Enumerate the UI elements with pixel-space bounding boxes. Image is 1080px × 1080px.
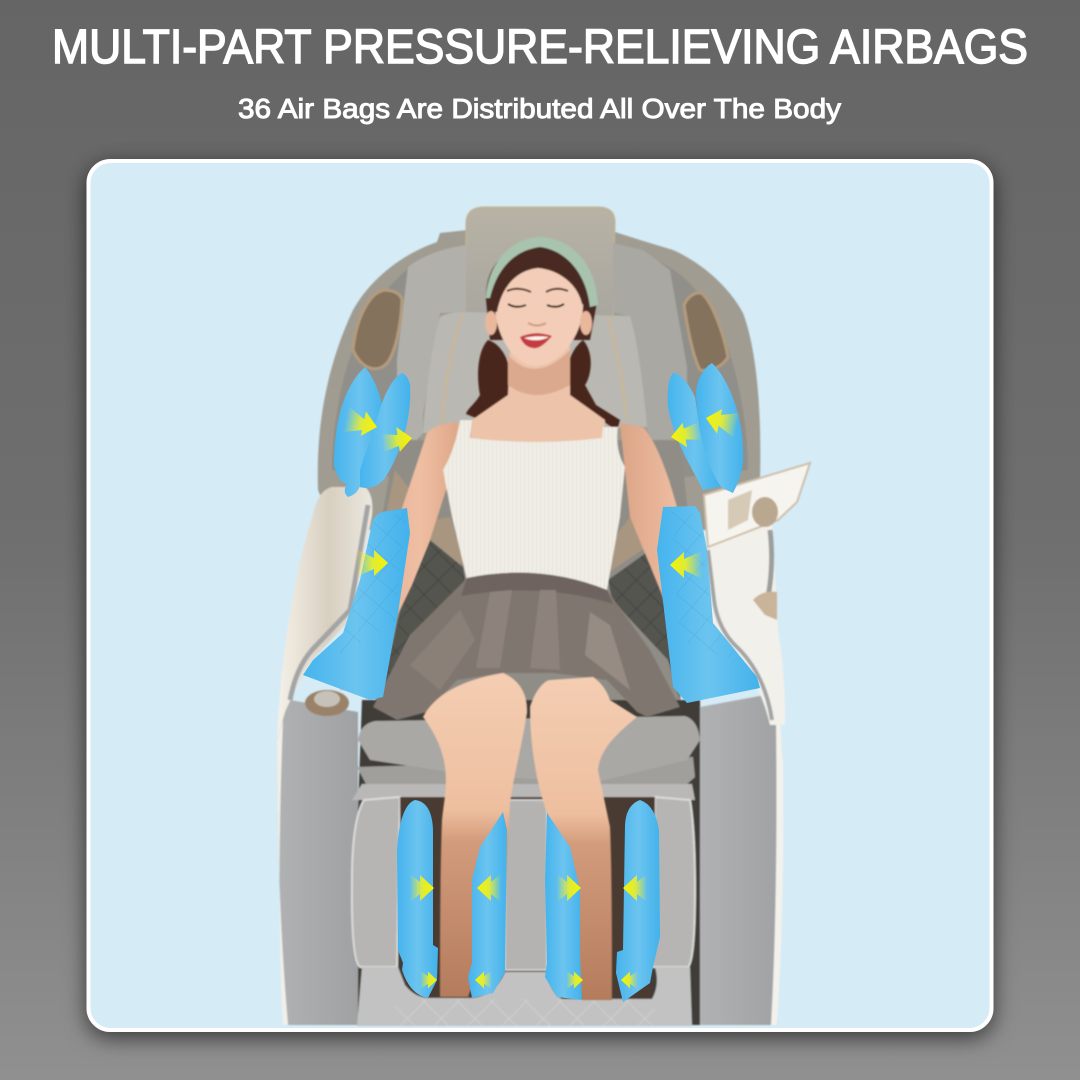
- tablet: [704, 463, 810, 547]
- subtitle: 36 Air Bags Are Distributed All Over The Body: [238, 93, 841, 124]
- face: [495, 262, 583, 366]
- yellow arrows: [343, 406, 740, 989]
- lower leg airbag 1: [397, 800, 438, 998]
- left control knob: [305, 690, 349, 716]
- lower leg airbag 3: [545, 813, 582, 1000]
- right gold strip: [607, 480, 670, 573]
- panel: product photo background: [88, 161, 992, 1030]
- headband: [486, 237, 598, 307]
- right pillow stripe: [608, 316, 627, 420]
- left eye: [508, 304, 526, 307]
- right quilted panel: [608, 550, 680, 700]
- leg rest centre channel: [505, 800, 547, 970]
- neck shadow: [508, 350, 570, 395]
- left side rim: [277, 720, 288, 1025]
- chair back shell: [318, 230, 760, 530]
- right leg: [530, 677, 637, 1000]
- right back panel: [613, 243, 687, 483]
- leg rest top band: [352, 784, 695, 800]
- right armrest: [706, 515, 785, 725]
- left quilted panel: [380, 540, 467, 700]
- left braid: [466, 340, 511, 421]
- left lower side: [277, 700, 358, 1025]
- lower leg airbag 4: [616, 800, 660, 1002]
- right side rim: [771, 720, 783, 1025]
- mid back: [375, 440, 690, 710]
- right side pad: [684, 293, 728, 370]
- hair back: [486, 244, 597, 340]
- left outer bag: [334, 367, 385, 497]
- calf well: [400, 797, 655, 998]
- right braid: [562, 340, 620, 431]
- left gold strip: [385, 470, 464, 590]
- right inner bag: [668, 373, 720, 490]
- skirt pleats: [410, 590, 630, 690]
- left back panel: [397, 245, 467, 463]
- right outer bag: [696, 363, 743, 493]
- left leg rest roller: [352, 797, 400, 967]
- right leg rest roller: [652, 797, 695, 967]
- headrest: [465, 207, 615, 320]
- shell inner band left: [332, 262, 420, 480]
- left inner bag: [360, 373, 410, 488]
- right lower side: [700, 695, 783, 1025]
- massage chair: [277, 207, 810, 1026]
- right arm: [620, 423, 725, 692]
- seat cushion lower: [357, 757, 695, 786]
- skirt: [373, 573, 680, 720]
- tablet base: [753, 592, 777, 620]
- left side pad: [353, 290, 402, 369]
- left pillow stripe: [442, 313, 463, 425]
- right brow: [546, 289, 568, 292]
- upper left airbags: [334, 367, 410, 497]
- lower leg airbag 2: [468, 812, 507, 998]
- left brow: [507, 289, 531, 292]
- shell inner band right: [660, 262, 748, 480]
- right ear: [580, 311, 592, 335]
- right eye: [547, 304, 564, 307]
- left leg: [423, 673, 527, 997]
- woman: [340, 237, 725, 1000]
- dark gap below skirt: [350, 700, 705, 1025]
- right forearm airbag: [657, 506, 760, 703]
- upper right airbags: [668, 363, 743, 493]
- fringe: [490, 250, 592, 312]
- title: MULTI-PART PRESSURE-RELIEVING AIRBAGS: [52, 21, 1028, 74]
- left armrest piping: [290, 505, 368, 700]
- left armrest: [277, 487, 372, 740]
- nose: [528, 323, 546, 326]
- right armrest piping: [708, 550, 772, 720]
- neck and chest: [470, 345, 605, 445]
- seat cushion: [358, 716, 700, 783]
- tablet mount knob: [752, 497, 778, 527]
- foot rest: [357, 967, 692, 1026]
- skirt waistband: [461, 573, 613, 604]
- left forearm airbag: [303, 508, 410, 700]
- left ear: [485, 311, 497, 335]
- mouth: [520, 333, 552, 348]
- left arm: [340, 422, 472, 690]
- back pillow: [423, 312, 647, 433]
- tablet holder stem: [768, 530, 772, 597]
- tank top: [443, 420, 625, 590]
